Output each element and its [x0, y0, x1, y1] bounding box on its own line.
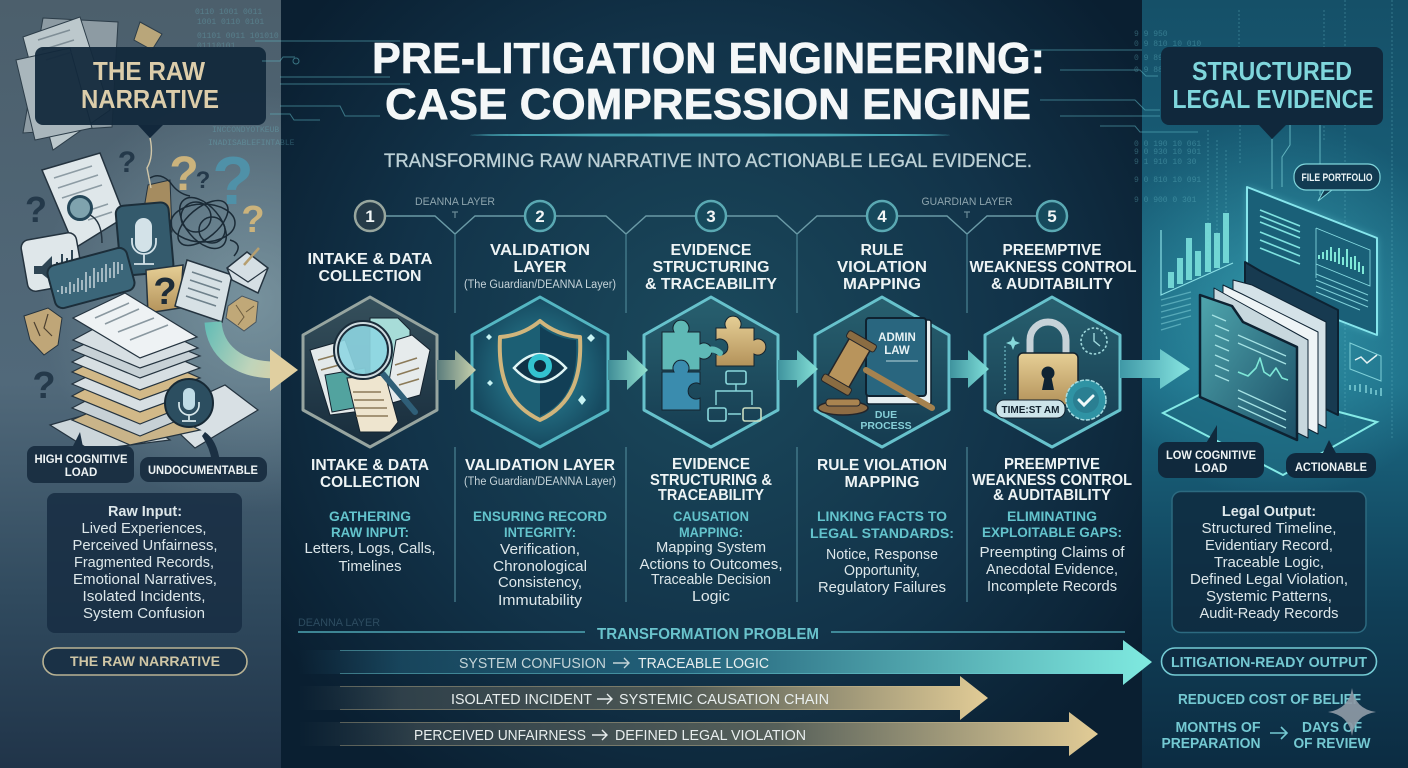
- title: CASE COMPRESSION ENGINE: [385, 80, 1031, 129]
- step number 3: [696, 201, 726, 231]
- step number 2: [525, 201, 555, 231]
- step 2 detail: INTEGRITY:: [504, 524, 576, 540]
- faint data rain: 9 1 910 10 30: [1134, 158, 1197, 167]
- callout: file portfolio: FILE PORTFOLIO: [1302, 172, 1373, 184]
- title: [372, 34, 1045, 129]
- step 3 detail: TRACEABILITY: [658, 487, 765, 504]
- heading: step 5: & AUDITABILITY: [991, 276, 1114, 293]
- label: undocumentable: UNDOCUMENTABLE: [148, 465, 258, 477]
- step 5 detail: Incomplete Records: [987, 579, 1117, 595]
- question marks: [25, 143, 265, 407]
- step 5 detail: ELIMINATING: [1007, 508, 1097, 524]
- text block: legal output: Evidentiary Record,: [1205, 538, 1333, 554]
- question marks: ?: [212, 143, 254, 219]
- label: guardian layer: GUARDIAN LAYER: [922, 196, 1013, 208]
- pill: litigation-ready output: LITIGATION-READY OUTPUT: [1171, 655, 1367, 671]
- audio card: [20, 232, 84, 292]
- callout: structured legal evidence heading: STRUCTURED: [1192, 56, 1352, 86]
- heading: transformation problem: TRANSFORMATION PROBLEM: [597, 626, 819, 643]
- step headings: [308, 242, 1136, 293]
- text block: legal output: Structured Timeline,: [1202, 521, 1336, 537]
- question marks: ?: [118, 146, 136, 179]
- faint data rain: [1134, 0, 1392, 440]
- faint data rain: 0 0 190 10 061: [1134, 140, 1201, 149]
- heading: step 4: [837, 242, 927, 293]
- papers and envelope: [175, 248, 268, 322]
- label: guardian layer: [922, 196, 1013, 218]
- arrow: step 3 to 4: [778, 350, 818, 388]
- callout: structured legal evidence heading: [1161, 47, 1383, 195]
- heading: step 1: [308, 251, 432, 285]
- label: high cognitive load: HIGH COGNITIVE: [34, 454, 128, 466]
- label: actionable: ACTIONABLE: [1295, 462, 1367, 474]
- faint binary text: 01101 0011 101010: [197, 32, 279, 41]
- faint data rain: 0 9 881: [1134, 66, 1168, 75]
- faint data rain: 9 0 930 10 901: [1134, 148, 1201, 157]
- icon: step 4 hexagon, gavel and law book: DUE: [875, 409, 897, 421]
- callout: structured legal evidence heading: LEGAL EVIDENCE: [1172, 84, 1374, 114]
- text: months to days: DAYS OF: [1302, 720, 1362, 736]
- microphone card: [115, 202, 174, 276]
- question marks: ?: [169, 148, 199, 201]
- step 4 detail: LINKING FACTS TO: [817, 508, 947, 524]
- icon: step 4 hexagon, gavel and law book: ADMIN: [878, 332, 916, 344]
- transformation arrow: traceable logic: SYSTEM CONFUSION: [459, 656, 606, 672]
- text block: legal output: Systemic Patterns,: [1206, 589, 1332, 605]
- step 4 detail: Notice, Response: [826, 547, 938, 563]
- transformation arrow: defined legal violation: DEFINED LEGAL VIOLATION: [615, 728, 806, 744]
- icon: step 2 hexagon, shield and eye: [472, 297, 608, 447]
- step number 4: [867, 201, 897, 231]
- heading: step 4: VIOLATION: [837, 259, 927, 276]
- heading: step 5: WEAKNESS CONTROL: [970, 259, 1136, 276]
- transformation arrow: systemic causation: SYSTEMIC CAUSATION CHAIN: [619, 692, 829, 708]
- text: months to days: OF REVIEW: [1294, 736, 1371, 752]
- label: high cognitive load: [27, 432, 134, 483]
- step 4 detail: [810, 457, 954, 596]
- heading: step 1: COLLECTION: [318, 268, 422, 285]
- arrow: step 1 to 2: [437, 350, 476, 390]
- step 5 detail: Anecdotal Evidence,: [986, 562, 1118, 578]
- faint binary text: 01110101: [197, 42, 236, 51]
- icon: step 3 hexagon, puzzle and flowchart: [644, 297, 778, 447]
- icon: step 1 hexagon, magnifier and documents: [303, 297, 437, 447]
- glowing data screen: [1247, 187, 1377, 335]
- pill: the raw narrative: THE RAW NARRATIVE: [70, 653, 220, 669]
- question marks: ?: [25, 189, 47, 230]
- step 4 detail: LEGAL STANDARDS:: [810, 525, 954, 541]
- text: months to days: [1162, 720, 1371, 752]
- faint data rain: 0 9 810 10 010: [1134, 40, 1201, 49]
- label: deanna layer: [415, 196, 495, 218]
- small side chart: [1350, 343, 1381, 396]
- heading: step 3: EVIDENCE: [670, 242, 752, 259]
- faint layer label: DEANNA LAYER: [298, 617, 380, 629]
- microphone badge: [165, 379, 213, 427]
- step 4 detail: RULE VIOLATION: [817, 457, 947, 474]
- icon: step 4 hexagon, gavel and law book: LAW: [884, 345, 910, 357]
- step 5 detail: & AUDITABILITY: [993, 487, 1112, 504]
- question marks: ?: [196, 167, 210, 194]
- heading: step 4: RULE: [860, 242, 904, 259]
- step 3 detail: STRUCTURING &: [650, 472, 772, 489]
- step 5 detail: [972, 456, 1132, 595]
- arrow: step 4 to 5: [950, 350, 989, 388]
- question card: ?: [153, 271, 177, 313]
- tangled scribble: [150, 176, 238, 257]
- panel: the raw narrative: [0, 0, 298, 768]
- question card: [146, 265, 183, 313]
- step 1 detail: RAW INPUT:: [331, 524, 409, 540]
- title: PRE-LITIGATION ENGINEERING:: [372, 34, 1045, 83]
- step 3 detail: Mapping System: [656, 540, 766, 556]
- platform: [1163, 382, 1377, 475]
- step 1 detail: [304, 457, 436, 575]
- circuit traces: [255, 41, 1198, 132]
- heading: step 2: LAYER: [514, 259, 566, 276]
- step 5 detail: WEAKNESS CONTROL: [972, 472, 1132, 489]
- faint data rain: 9 0 900 0 301: [1134, 196, 1197, 205]
- folder stack: [1200, 262, 1338, 440]
- faint data rain: 0 9 891: [1134, 54, 1168, 63]
- faint binary text: 0110 1001 0011: [195, 8, 262, 17]
- callout: file portfolio: [1294, 164, 1380, 201]
- faint data rain: 9 9 950: [1134, 30, 1168, 39]
- label: low cognitive load: LOW COGNITIVE: [1166, 450, 1256, 462]
- heading: step 5: [970, 242, 1136, 293]
- label: low cognitive load: [1158, 425, 1264, 478]
- step 4 detail: MAPPING: [844, 474, 920, 491]
- waveform card: [46, 246, 136, 310]
- text block: legal output: Legal Output:: [1222, 504, 1316, 520]
- stack of papers: [50, 293, 258, 450]
- text block: legal output: Audit-Ready Records: [1200, 606, 1338, 622]
- step 1 detail: COLLECTION: [320, 474, 420, 491]
- text: months to days: PREPARATION: [1162, 736, 1260, 752]
- label: high cognitive load: LOAD: [65, 467, 97, 479]
- faint binary text: 1001 0110 0101: [197, 18, 264, 27]
- step number 1: 1: [365, 207, 375, 226]
- step 1 detail: Timelines: [338, 559, 402, 575]
- step 4 detail: Regulatory Failures: [818, 580, 946, 596]
- step timeline: [355, 196, 1067, 602]
- text block: raw input: Raw Input:: [108, 504, 182, 520]
- step 3 detail: MAPPING:: [679, 524, 743, 540]
- text block: raw input: System Confusion: [83, 606, 205, 622]
- transformation arrow: systemic causation: ISOLATED INCIDENT: [451, 692, 592, 708]
- text block: raw input: Perceived Unfairness,: [72, 538, 218, 554]
- heading: step 2: VALIDATION: [490, 242, 590, 259]
- heading: step 3: [645, 242, 778, 293]
- step 2 detail: [464, 457, 616, 609]
- text block: raw input: [47, 493, 242, 633]
- label: undocumentable: [140, 432, 267, 482]
- faint data rain: 9 0 810 10 091: [1134, 176, 1201, 185]
- step 1 detail: Letters, Logs, Calls,: [304, 541, 436, 557]
- loose papers behind heading: [16, 17, 162, 150]
- text block: legal output: Defined Legal Violation,: [1190, 572, 1348, 588]
- callout: the raw narrative heading: THE RAW: [93, 56, 205, 86]
- step number 2: 2: [535, 207, 545, 226]
- heading: step 5: PREEMPTIVE: [1002, 242, 1102, 259]
- step 5 detail: Preempting Claims of: [980, 545, 1126, 561]
- step 5 detail: EXPLOITABLE GAPS:: [982, 524, 1122, 540]
- subtitle: TRANSFORMING RAW NARRATIVE INTO ACTIONABLE LEGAL EVIDENCE.: [384, 151, 1032, 172]
- step 3 detail: CAUSATION: [673, 508, 749, 524]
- text block: legal output: Traceable Logic,: [1214, 555, 1324, 571]
- step 2 detail: VALIDATION LAYER: [465, 457, 615, 474]
- step 2 detail: ENSURING RECORD: [473, 508, 607, 524]
- document with lens: [42, 153, 172, 248]
- step 2 detail: Immutability: [498, 593, 583, 609]
- crumpled scraps: [24, 296, 258, 355]
- text block: raw input: Isolated Incidents,: [82, 589, 206, 605]
- faint binary text: INCCONDYOTKEUB: [212, 126, 279, 135]
- icon: step 5 hexagon, padlock and badge: [985, 297, 1120, 447]
- question marks: ?: [32, 365, 56, 407]
- step number 3: 3: [706, 207, 716, 226]
- text block: legal output: [1172, 492, 1366, 632]
- heading: step 3: STRUCTURING: [652, 259, 770, 276]
- step 2 detail: Chronological: [493, 559, 587, 575]
- text block: raw input: Lived Experiences,: [82, 521, 206, 537]
- icon: step 5 hexagon, padlock and badge: TIME:ST AM: [1002, 404, 1060, 416]
- heading: step 4: MAPPING: [843, 276, 921, 293]
- arrow: step 2 to 3: [608, 350, 648, 390]
- step 2 detail: Verification,: [500, 542, 580, 558]
- text block: raw input: Emotional Narratives,: [73, 572, 217, 588]
- step 3 detail: Actions to Outcomes,: [640, 557, 782, 573]
- label: deanna layer: DEANNA LAYER: [415, 196, 495, 208]
- step number 5: 5: [1047, 207, 1057, 226]
- step 3 detail: EVIDENCE: [672, 456, 750, 473]
- label: low cognitive load: LOAD: [1195, 463, 1227, 475]
- text: months to days: MONTHS OF: [1176, 720, 1261, 736]
- step 2 detail: Consistency,: [498, 575, 582, 591]
- step number 1: [355, 201, 385, 231]
- heading: step 3: & TRACEABILITY: [645, 276, 778, 293]
- curved arrow into step 1: [213, 322, 298, 391]
- step number 5: [1037, 201, 1067, 231]
- faint binary text: [195, 8, 295, 148]
- transformation arrow: defined legal violation: PERCEIVED UNFAIRNESS: [414, 728, 586, 744]
- icon: step 4 hexagon, gavel and law book: PROCESS: [860, 420, 912, 432]
- question marks: ?: [241, 199, 265, 241]
- heading: step 2: [464, 242, 616, 291]
- sparkle: [1328, 688, 1376, 736]
- step 3 detail: Traceable Decision: [651, 572, 771, 588]
- pill: the raw narrative: [43, 648, 247, 675]
- lower step text: [304, 456, 1132, 609]
- step 3 detail: Logic: [692, 589, 730, 605]
- step number 4: 4: [877, 207, 887, 226]
- text block: raw input: Fragmented Records,: [74, 555, 214, 571]
- bar chart: [1161, 213, 1233, 330]
- label: actionable: [1286, 440, 1376, 478]
- heading: step 1: INTAKE & DATA: [308, 251, 432, 268]
- step 3 detail: [640, 456, 782, 605]
- callout: the raw narrative heading: NARRATIVE: [81, 84, 219, 114]
- panel: structured legal evidence: [1134, 0, 1408, 768]
- pill: litigation-ready output: [1162, 648, 1376, 675]
- arrow: step 5 to output: [1120, 349, 1190, 389]
- title underline glow: [470, 134, 950, 136]
- step 1 detail: INTAKE & DATA: [311, 457, 429, 474]
- faint binary text: INADISABLEFINTABLE: [208, 139, 295, 148]
- transformation arrow: defined legal violation: [298, 712, 1098, 756]
- heading: step 2: (The Guardian/DEANNA Layer): [464, 279, 616, 291]
- step 2 detail: (The Guardian/DEANNA Layer): [464, 476, 616, 488]
- transformation arrow: traceable logic: [298, 640, 1152, 685]
- icon: step 4 hexagon, gavel and law book: [815, 297, 949, 447]
- callout: the raw narrative heading: [35, 47, 266, 188]
- step 1 detail: GATHERING: [329, 508, 411, 524]
- step 5 detail: PREEMPTIVE: [1004, 456, 1100, 473]
- text: reduced cost of belief: REDUCED COST OF BELIEF: [1178, 692, 1361, 708]
- transformation arrow: systemic causation: [298, 676, 988, 720]
- step 4 detail: Opportunity,: [844, 563, 920, 579]
- transformation arrow: traceable logic: TRACEABLE LOGIC: [638, 656, 769, 672]
